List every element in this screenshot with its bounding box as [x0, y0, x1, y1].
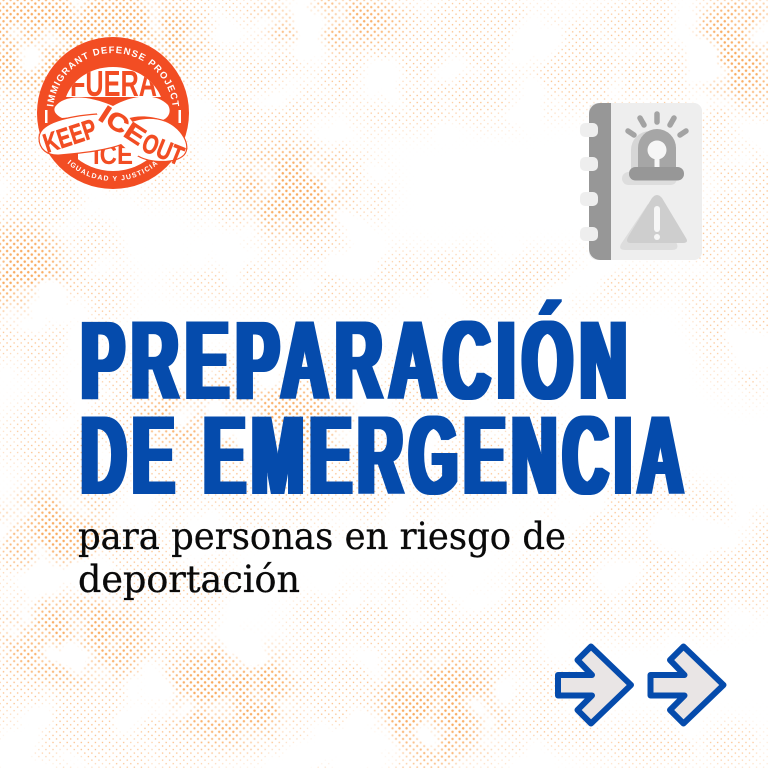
icon: emergency notebook	[580, 103, 702, 260]
arrow: next 2	[650, 646, 724, 724]
subtitle line 2: deportación	[78, 558, 300, 601]
warning triangle icon	[620, 195, 687, 250]
notebook spine	[589, 103, 611, 260]
title line 1: PREPARACIÓN	[81, 299, 627, 423]
logo: Immigrant Defense Project badge: OUT	[138, 128, 188, 171]
siren icon	[622, 114, 686, 185]
notebook rings	[580, 123, 598, 241]
title	[81, 299, 683, 519]
subtitle line 1: para personas en riesgo de	[78, 515, 566, 558]
arrow: next 1	[558, 646, 631, 724]
logo: Immigrant Defense Project badge: IGUALDAD Y JUSTICIA	[68, 160, 158, 181]
subtitle	[78, 515, 566, 601]
logo: Immigrant Defense Project badge: ICE	[93, 139, 133, 170]
logo: Immigrant Defense Project badge: ICE	[94, 101, 151, 151]
logo: Immigrant Defense Project badge: IMMIGRANT DEFENSE PROJECT	[46, 46, 180, 106]
notebook page	[589, 103, 702, 260]
logo: Immigrant Defense Project badge: FUERA	[70, 63, 157, 104]
logo: Immigrant Defense Project badge	[37, 37, 189, 189]
logo: Immigrant Defense Project badge: KEEP	[40, 113, 100, 159]
title line 2: DE EMERGENCIA	[81, 394, 683, 519]
